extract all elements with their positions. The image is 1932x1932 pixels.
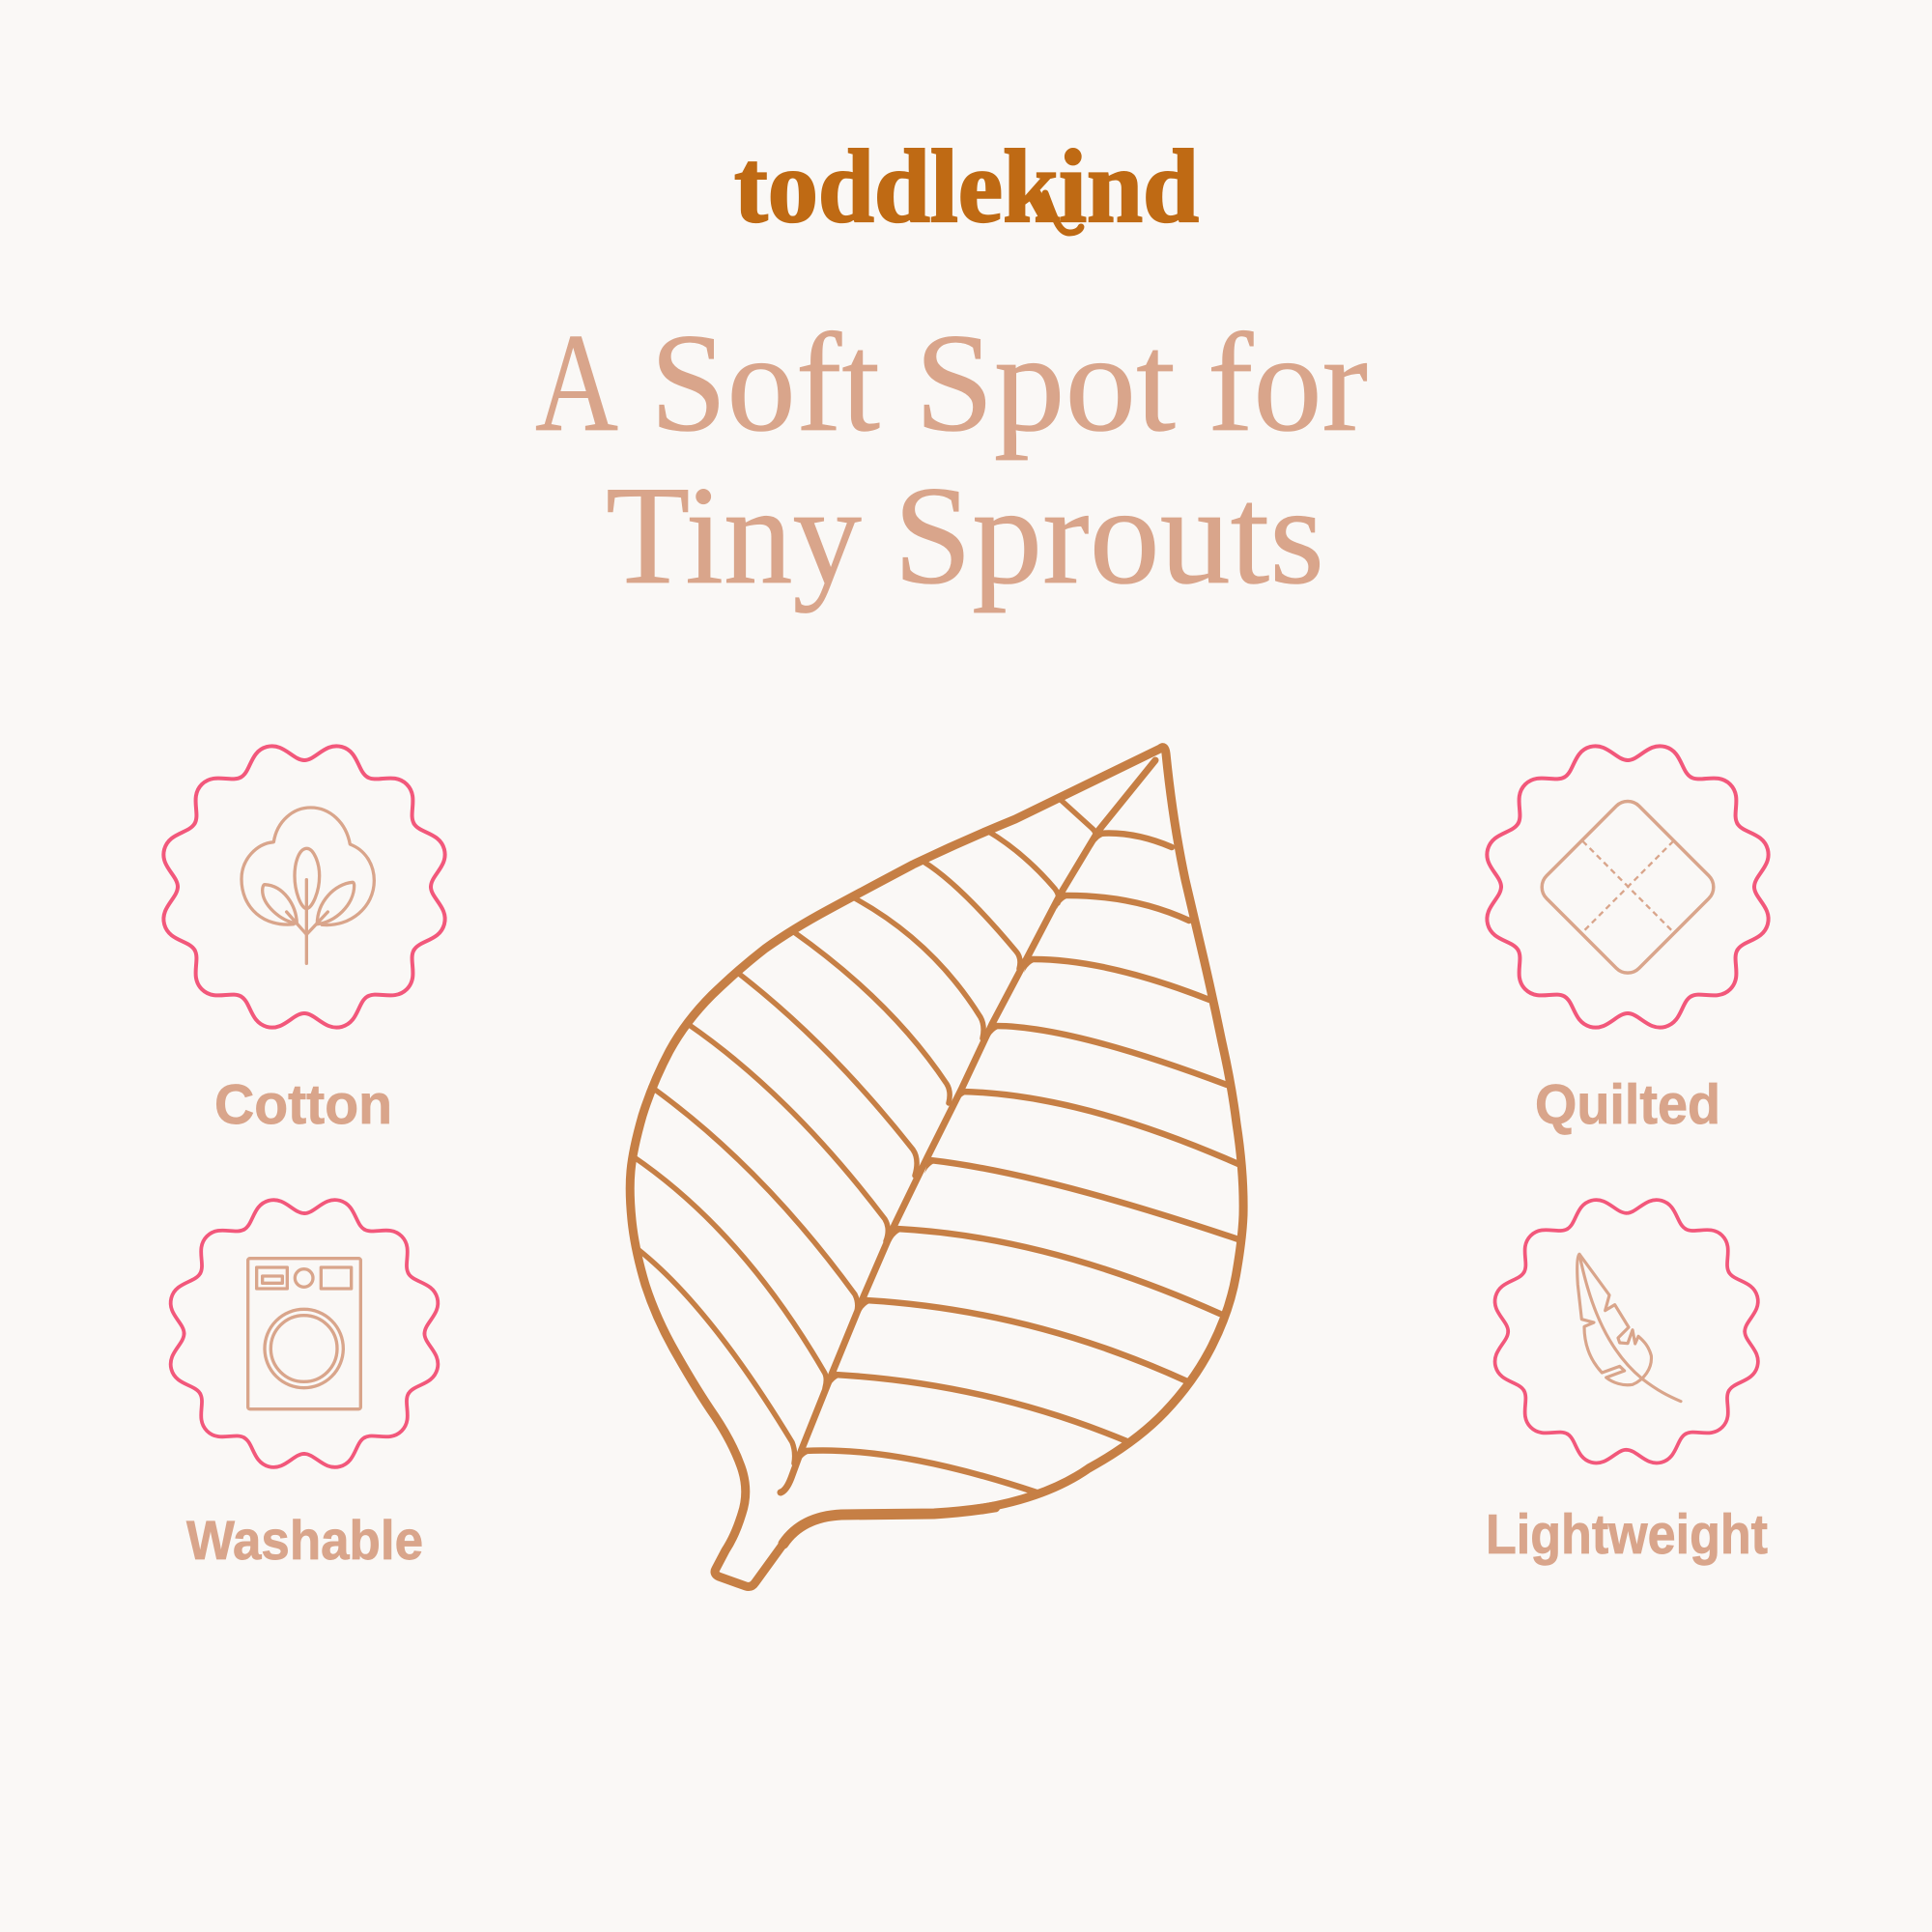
title: A (535, 304, 618, 461)
label: Washable: Washable (186, 1510, 423, 1572)
left veins (1061, 800, 1095, 838)
title: Tiny (606, 457, 862, 613)
leaf outline (630, 748, 1243, 1586)
label: Cotton: Cotton (214, 1073, 392, 1136)
icon: feather (1577, 1254, 1681, 1402)
title: Sprouts (894, 457, 1324, 613)
title: for (1208, 304, 1368, 461)
label: Lightweight: Lightweight (1486, 1503, 1768, 1566)
title (535, 304, 1368, 613)
rounded vein junctions (798, 834, 1112, 1464)
label: Quilted: Quilted (1535, 1073, 1720, 1136)
right veins (1098, 834, 1172, 847)
thick lower edge (783, 1507, 995, 1544)
logo: toddlekind: toddlekind (734, 129, 1199, 244)
title: Spot (915, 304, 1176, 461)
badge: Lightweight (1483, 1188, 1770, 1566)
icon: quilted square (1535, 795, 1720, 980)
title: Soft (650, 304, 880, 461)
icon: washing machine (248, 1259, 360, 1409)
badge: Quilted (1474, 733, 1781, 1136)
icon: cotton plant (242, 808, 374, 963)
midrib (781, 760, 1155, 1492)
badge: Cotton (151, 733, 458, 1136)
badge: Washable (158, 1188, 450, 1572)
central leaf illustration (630, 748, 1243, 1586)
